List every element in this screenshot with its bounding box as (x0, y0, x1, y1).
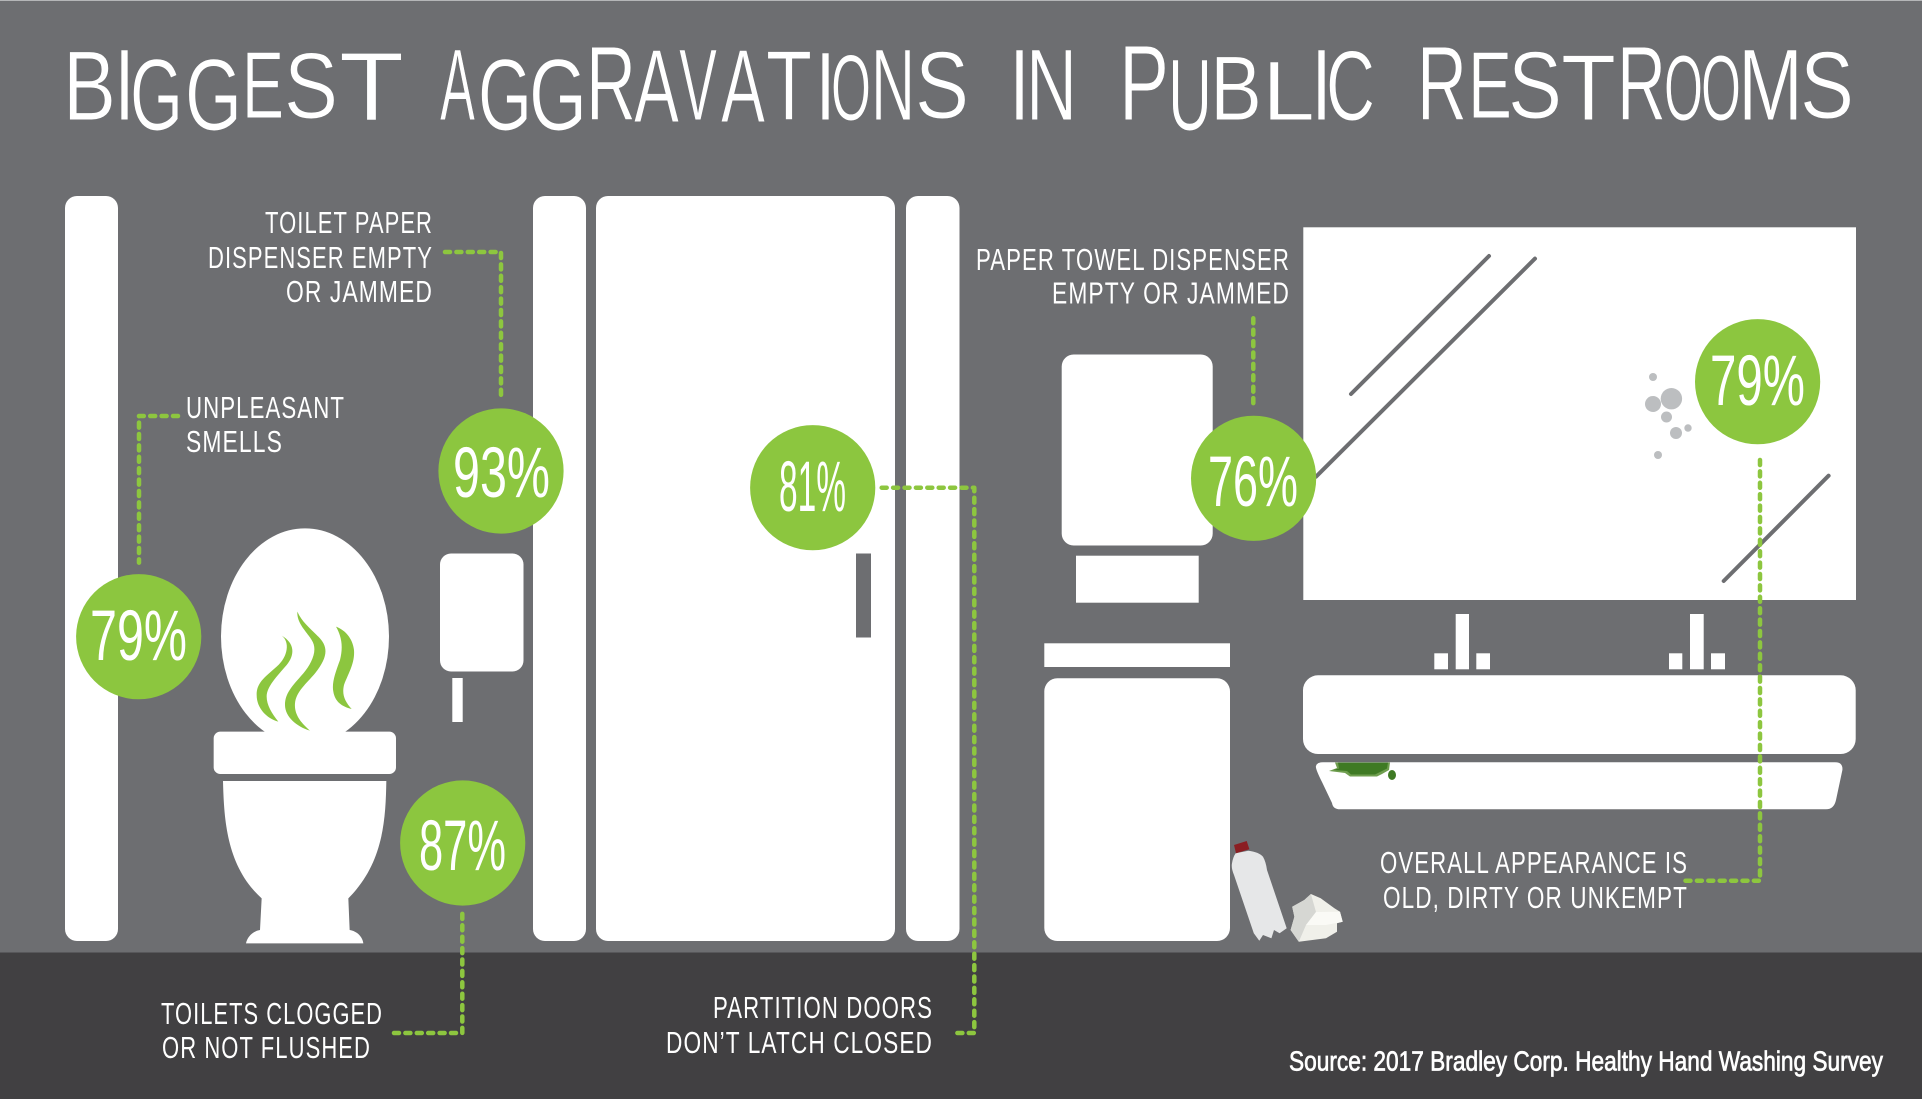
label: overall appearance (1380, 845, 1688, 915)
label: unpleasant smells (186, 390, 345, 459)
stat: 81% partition doors (750, 425, 875, 550)
title: R (1417, 25, 1467, 143)
title: G (130, 38, 183, 152)
title: O (831, 35, 871, 140)
icon: sink counter (1303, 675, 1856, 754)
icon: left faucet (1434, 614, 1490, 669)
label: toilet paper dispenser empty or jammed: OR JAMMED (286, 274, 433, 309)
floor band (0, 952, 1922, 1099)
label: overall appearance: OVERALL APPEARANCE IS (1380, 845, 1688, 880)
label: partition doors don't latch closed (666, 990, 933, 1060)
title: L (1262, 44, 1315, 138)
label: partition doors don't latch closed: DON’T LATCH CLOSED (666, 1025, 933, 1060)
title: T (766, 30, 812, 141)
title: C (1326, 30, 1375, 141)
connector: paper towel dispenser (1251, 318, 1256, 405)
stall partition post left (65, 196, 118, 941)
stat: 93% toilet paper dispenser: 93% (453, 434, 550, 513)
title: B (63, 30, 116, 141)
title: T (1561, 35, 1616, 140)
icon: trash can (1044, 643, 1230, 941)
label: overall appearance: OLD, DIRTY OR UNKEMPT (1383, 880, 1688, 915)
title: I (815, 32, 836, 141)
stat: 87% toilets clogged: 87% (419, 807, 506, 886)
stat: 87% toilets clogged (400, 780, 525, 906)
title: P (1119, 22, 1169, 143)
title: R (1617, 25, 1666, 143)
label: toilet paper dispenser empty or jammed: DISPENSER EMPTY (208, 240, 433, 275)
icon: discarded plastic bottle (1232, 841, 1287, 941)
stat: 79% unpleasant smells (76, 574, 201, 699)
label: paper towel dispenser empty or jammed: PAPER TOWEL DISPENSER (976, 242, 1290, 277)
stat: 81% partition doors: 81% (779, 448, 846, 527)
stat: 76% paper towel dispenser (1191, 416, 1316, 541)
title: A (721, 29, 765, 145)
label: unpleasant smells: UNPLEASANT (186, 390, 345, 425)
title: M (1738, 28, 1803, 142)
title: N (871, 28, 915, 142)
label: toilet paper dispenser empty or jammed (208, 205, 433, 309)
label: unpleasant smells: SMELLS (186, 424, 283, 459)
title: U (1168, 38, 1212, 152)
stall partition post middle (533, 196, 586, 941)
icon: toilet paper dispenser (440, 554, 524, 722)
stall partition post right (906, 196, 960, 941)
stat: 79% unpleasant smells: 79% (90, 597, 187, 676)
title: A (634, 29, 679, 145)
title: E (1468, 32, 1512, 139)
title: B (1210, 38, 1262, 140)
title: G (478, 38, 532, 152)
title: O (1664, 36, 1703, 140)
title: V (679, 28, 717, 142)
icon: toilet with green odor waves (214, 528, 396, 943)
connector: toilets clogged (394, 913, 462, 1033)
icon: mirror (1303, 227, 1856, 600)
icon: paper towel dispenser (1062, 354, 1213, 603)
title: S (284, 33, 338, 138)
label: toilets clogged or not flushed: OR NOT FLUSHED (162, 1030, 371, 1065)
title: G (185, 38, 242, 152)
connector: unpleasant smells (139, 416, 178, 563)
title: I (1009, 28, 1030, 142)
stat: 79% overall appearance (1695, 319, 1820, 444)
title: G (529, 38, 587, 152)
title: E (242, 32, 284, 139)
door latch handle (856, 554, 871, 638)
connector: overall appearance (1686, 459, 1760, 881)
title: T (339, 32, 404, 141)
title: S (1800, 32, 1854, 139)
title: A (440, 28, 475, 142)
icon: right faucet (1669, 614, 1725, 669)
title: I (1311, 28, 1332, 142)
title: S (1508, 32, 1562, 139)
label: toilet paper dispenser empty or jammed: TOILET PAPER (265, 205, 433, 240)
title: O (1701, 36, 1741, 140)
icon: sink basin with green stain (1316, 762, 1842, 809)
stat: 79% overall appearance: 79% (1710, 342, 1805, 421)
label: paper towel dispenser empty or jammed: EMPTY OR JAMMED (1052, 276, 1290, 310)
title: S (915, 32, 969, 139)
stat: 76% paper towel dispenser: 76% (1208, 443, 1298, 522)
stat: 93% toilet paper dispenser (438, 408, 564, 534)
icon: crumpled paper (1291, 894, 1343, 942)
title: R (586, 25, 636, 143)
connector: partition doors (882, 488, 974, 1033)
label: toilets clogged or not flushed: TOILETS CLOGGED (161, 996, 383, 1031)
title: I (114, 28, 135, 142)
stall door (596, 196, 895, 941)
connector: toilet paper dispenser (445, 252, 501, 397)
title: N (1026, 28, 1077, 142)
label: paper towel dispenser empty or jammed (976, 242, 1290, 310)
label: partition doors don't latch closed: PARTITION DOORS (713, 990, 933, 1025)
label: toilets clogged or not flushed (161, 996, 383, 1065)
